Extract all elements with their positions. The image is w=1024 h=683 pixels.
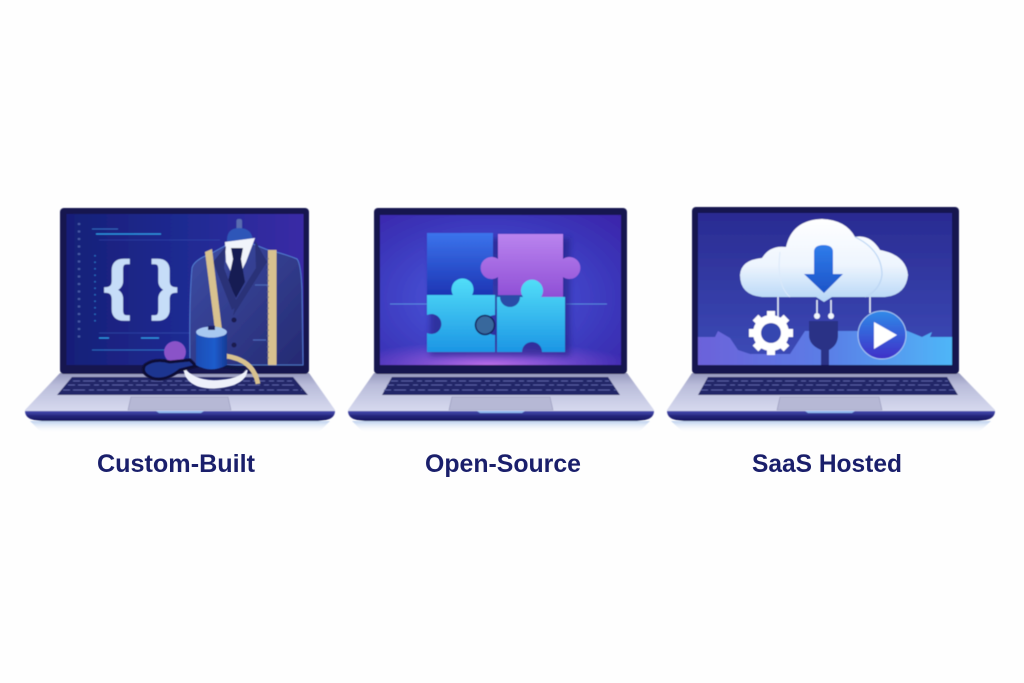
label: SaaS Hosted: SaaS Hosted [752,450,902,478]
puzzle connector [476,316,494,334]
panel: SaaS Hosted laptop [667,207,995,433]
laptop 2 lid [374,208,627,374]
icon: curly braces: } [150,246,178,326]
laptop 1 trackpad [128,397,231,410]
laptop 3 keyboard [698,377,958,395]
laptop 1 keyboard [57,377,308,395]
laptop 3 trackpad [777,397,882,410]
label: Open-Source: Open-Source [425,450,581,478]
puzzle piece: purple [481,234,580,297]
icon: curly braces [103,246,178,326]
connector lines [778,297,870,325]
laptop 2 screen [380,215,621,365]
icon: plug [809,300,838,365]
laptop 3 notch [805,411,855,413]
icon: download arrow [804,245,843,293]
puzzle piece: right cyan [497,280,565,352]
laptop 2 notch [477,411,525,413]
laptop 1 base [25,373,335,413]
icon: puzzle pieces [427,233,580,356]
icon: cloud [740,219,908,302]
laptop 3 front lip [667,411,995,421]
laptop 3 reflection [671,421,991,433]
laptop 1 screen [66,214,304,365]
icon: tailored suit on mannequin [190,219,303,365]
laptop 3 screen [698,213,952,365]
light streak [390,303,607,305]
laptop 2 base [348,373,654,413]
panel: Open-Source laptop [348,208,654,433]
laptop 2 front lip [348,411,654,421]
dark gap below purple [495,295,525,309]
icon: play button [858,311,906,359]
laptop 3 lid [692,207,959,374]
laptop 2 keyboard [382,377,620,395]
icon: gear [749,311,793,355]
puzzle piece: blue [427,233,493,295]
laptop 2 trackpad [449,397,553,410]
screen glow [380,325,621,365]
laptop 1 front lip [25,411,335,421]
icon: spool, scissors and tape [144,326,258,388]
laptop 3 base [667,373,995,413]
laptop 1 notch [156,411,204,413]
puzzle piece: left cyan [427,278,495,352]
laptop 2 reflection [352,421,650,433]
icon: curly braces: { [103,246,131,326]
panel: Custom-Built laptop [25,208,335,433]
code lines [79,223,220,350]
laptop 1 reflection [30,421,330,433]
laptop 1 lid [60,208,309,374]
label: Custom-Built: Custom-Built [97,450,256,478]
landscape band [698,330,952,365]
